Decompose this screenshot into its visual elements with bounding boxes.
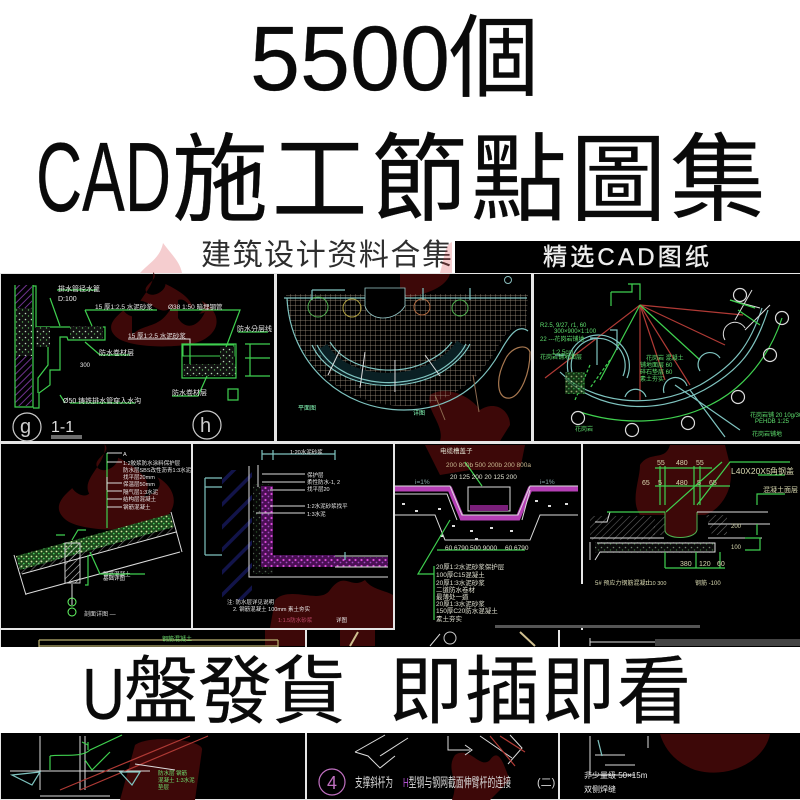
panel: purple channel section: 20厚1:3水泥砂浆: [436, 578, 485, 587]
panel: curved plaza radial plan: 300×900×1:100: [554, 329, 597, 335]
panel: semicircular paving plan: [277, 274, 531, 441]
panel: L-shaped waterproofing section: 柔性防水-1, 2: [307, 478, 340, 486]
panel: sloped roof section: 隔气层1:3水泥: [123, 488, 159, 496]
panel: purple channel section: 500 9000: [470, 545, 497, 552]
panel: lower row left drawing: [1, 630, 305, 800]
panel: curved plaza radial plan: 1:2.5cm: [552, 350, 573, 356]
panel: wall drain detail g/h: h: [200, 415, 211, 437]
panel: purple channel section: 20厚1:3水泥砂浆: [436, 599, 485, 608]
panel: lower row middle drawing: 支撑斜杆为: [355, 775, 393, 790]
panel: gutter cross section: 480: [676, 480, 688, 487]
panel: curved plaza radial plan: 花岗岩: [575, 425, 593, 433]
panel: wall drain detail g/h: Ø38 1:50 暗埋钢管: [168, 302, 223, 311]
panel: gutter cross section: 5: [697, 480, 701, 487]
panel: L-shaped waterproofing section: 1:2水泥砂浆找平: [307, 502, 348, 510]
panel: sloped roof section: 钢筋混凝土: [123, 503, 151, 511]
watermark flames over white gaps: [140, 242, 452, 273]
title: CAD施工節點圖集: CAD: [36, 122, 171, 232]
panel: sloped roof section: [1, 444, 192, 628]
panel: lower row middle drawing: 4: [327, 773, 337, 793]
panel: purple channel section: 二道防水卷材: [436, 585, 476, 594]
panel: purple channel section: 电缆槽盖子: [440, 446, 473, 455]
panel: L-shaped waterproofing section: 找平层20: [307, 485, 330, 493]
panel: curved plaza radial plan: [534, 274, 800, 441]
panel: curved plaza radial plan: 花岗岩铺地: [752, 430, 782, 438]
panel: sloped roof section: 防水层SBS改性沥青1:3水泥: [123, 466, 192, 474]
panel: purple channel section: 最薄处一道: [436, 592, 469, 601]
panel: sloped roof section: 结构层混凝土: [123, 495, 157, 503]
subtitle: U盤發貨 即插即看: 即插即看: [389, 650, 691, 733]
subtitle: U盤發貨 即插即看: U: [82, 655, 125, 735]
title: CAD施工節點圖集: 施工節點圖集: [172, 127, 766, 234]
panel: curved plaza radial plan: 碎石垫层 60: [640, 368, 673, 376]
panel: wall drain detail g/h: 防水卷材层: [172, 388, 207, 397]
panel: wall drain detail g/h: 防水卷材层: [99, 348, 134, 357]
panel: lower row left drawing: 混凝土 1:3水泥: [158, 776, 195, 784]
panel: L-shaped waterproofing section: [193, 444, 393, 628]
panel: sloped roof section: 1:2胶浆防水涂料保护层: [123, 459, 181, 467]
panel: sloped roof section: A: [123, 452, 127, 458]
black image sheet background: [0, 241, 800, 800]
panel: wall drain detail g/h: 300: [80, 363, 91, 369]
panel: L-shaped waterproofing section: 保护层: [307, 471, 324, 479]
panel: gutter cross section: 混凝土面层: [763, 485, 798, 494]
panel: wall drain detail g/h: 防水分层线: [237, 324, 272, 333]
panel: L-shaped waterproofing section: 1:20水泥砂浆: [290, 448, 323, 456]
subtitle: U盤發貨 即插即看: 盤發貨: [124, 650, 346, 733]
panel: sloped roof section: 找平层20mm: [123, 473, 155, 481]
panel: lower row middle drawing: (二): [537, 777, 555, 789]
panel: L-shaped waterproofing section: 2. 钢筋混凝土 100mm 素土夯实: [233, 605, 311, 613]
panel: gutter cross section: 100: [731, 545, 742, 551]
panel: lower row left drawing: 垫层: [158, 783, 170, 791]
panel: curved plaza radial plan: 铺地面层 60: [640, 361, 673, 369]
panel: gutter cross section: 55: [696, 460, 704, 467]
panel: semicircular paving plan: 详图: [413, 409, 425, 417]
panel: purple channel section: [395, 444, 581, 630]
panel: sloped roof section: 基础详图: [103, 574, 126, 582]
panel: wall drain detail g/h: Ø50 铸铁排水管穿入水沟: [63, 396, 141, 405]
panel: gutter cross section: 65: [642, 480, 650, 487]
panel: purple channel section: i=1%: [415, 479, 430, 486]
panel: gutter cross section: 钢筋 -100: [695, 579, 721, 587]
panel: gutter cross section: 60: [717, 561, 725, 568]
panel: gutter cross section: 480: [676, 460, 688, 467]
panel: sloped roof section: 剖面详图 —: [84, 610, 116, 618]
panel: wall drain detail g/h: g: [20, 416, 31, 438]
panel: curved plaza radial plan: 22 ---花岗岩铺地: [540, 335, 584, 343]
panel: lower row right drawing: 双侧焊缝: [584, 784, 616, 794]
panel: L-shaped waterproofing section: 注: 防水层详见说明: [227, 598, 275, 606]
panel: curved plaza radial plan: R2.5, 9/27, r1, 60: [540, 323, 587, 329]
panel: purple channel section: 素土夯实: [436, 614, 462, 623]
panel: wall drain detail g/h: [1, 272, 274, 441]
panel: gutter cross section: 55: [657, 460, 665, 467]
panel: wall drain detail g/h: 15 厚1:2.5 水泥砂浆: [95, 302, 153, 311]
panel: gutter cross section: 120: [699, 561, 711, 568]
panel: purple channel section: 60 6790: [505, 545, 529, 552]
panel: lower row middle drawing: H型钢与钢网截面伸臂杆的连接: [403, 775, 511, 790]
panel: lower row left drawing: 防水层 钢筋: [158, 769, 188, 777]
panel: gutter cross section: L40X20X5: [731, 466, 771, 476]
panel: purple channel section: 150厚C20防水混凝土: [436, 606, 498, 615]
white band: [0, 647, 800, 733]
title: 5500個: 個: [449, 9, 539, 109]
panel: curved plaza radial plan: 花岗岩铺地面层: [540, 353, 582, 361]
panel: lower row left drawing: 钢筋混凝土: [162, 635, 192, 643]
panel: L-shaped waterproofing section: 1:3水泥: [307, 510, 326, 518]
panel: purple channel section: i=1%: [540, 479, 555, 486]
panel: gutter cross section: 角钢盖: [770, 466, 794, 476]
panel: gutter cross section: 5# 预应力钢筋混凝土: [595, 579, 651, 587]
panel: lower row right drawing: 非少量级 50×15m: [584, 770, 648, 780]
panel: L-shaped waterproofing section: 1:1.5防水砂浆: [278, 616, 313, 624]
panel: gutter cross section: [495, 444, 800, 630]
panel: lower row middle drawing: [307, 630, 558, 800]
header strip: 精选CAD图纸: 精选CAD图纸: [543, 244, 709, 271]
panel: sloped roof section: 保温层50mm: [123, 480, 155, 488]
panel: purple channel section: 20 125 200 20 125 200: [450, 474, 517, 481]
panel: curved plaza radial plan: 素土夯实: [640, 375, 664, 383]
panel: wall drain detail g/h: D:100: [58, 296, 77, 303]
panel: semicircular paving plan: 平面图: [298, 405, 316, 412]
panel: gutter cross section: 5: [658, 480, 662, 487]
panel: purple channel section: 60 6790: [445, 545, 469, 552]
panel: purple channel section: 200 800b 500 200b 200 800a: [446, 462, 531, 469]
panel: gutter cross section: 200: [731, 524, 742, 530]
panel: wall drain detail g/h: 排水管径水篦: [58, 284, 100, 293]
panel: purple channel section: 20厚1:2水泥砂浆保护层: [436, 562, 505, 571]
panel: gutter cross section: 380: [680, 561, 692, 568]
panel: gutter cross section: 1:10 300: [645, 581, 666, 587]
panel: gutter cross section: 65: [709, 480, 717, 487]
panel: wall drain detail g/h: 15 厚1:2.5 水泥砂浆: [128, 331, 186, 340]
panel: wall drain detail g/h: 1-1: [51, 419, 74, 436]
panel: lower row right drawing: [560, 630, 800, 799]
panel: L-shaped waterproofing section: 详图: [336, 616, 348, 624]
title: 5500個: 5500: [250, 8, 450, 110]
panel: purple channel section: 100厚C15混凝土: [436, 570, 485, 579]
panel: sloped roof section: 钢筋混凝土: [103, 570, 131, 578]
subtitle: U盤發貨 即插即看: [82, 650, 691, 735]
panel: curved plaza radial plan: PEHDB 1:25: [755, 419, 790, 425]
header strip: 建筑设计资料合集: 建筑设计资料合集: [201, 239, 452, 272]
panel: curved plaza radial plan: 花岗岩 混凝土: [646, 354, 684, 362]
